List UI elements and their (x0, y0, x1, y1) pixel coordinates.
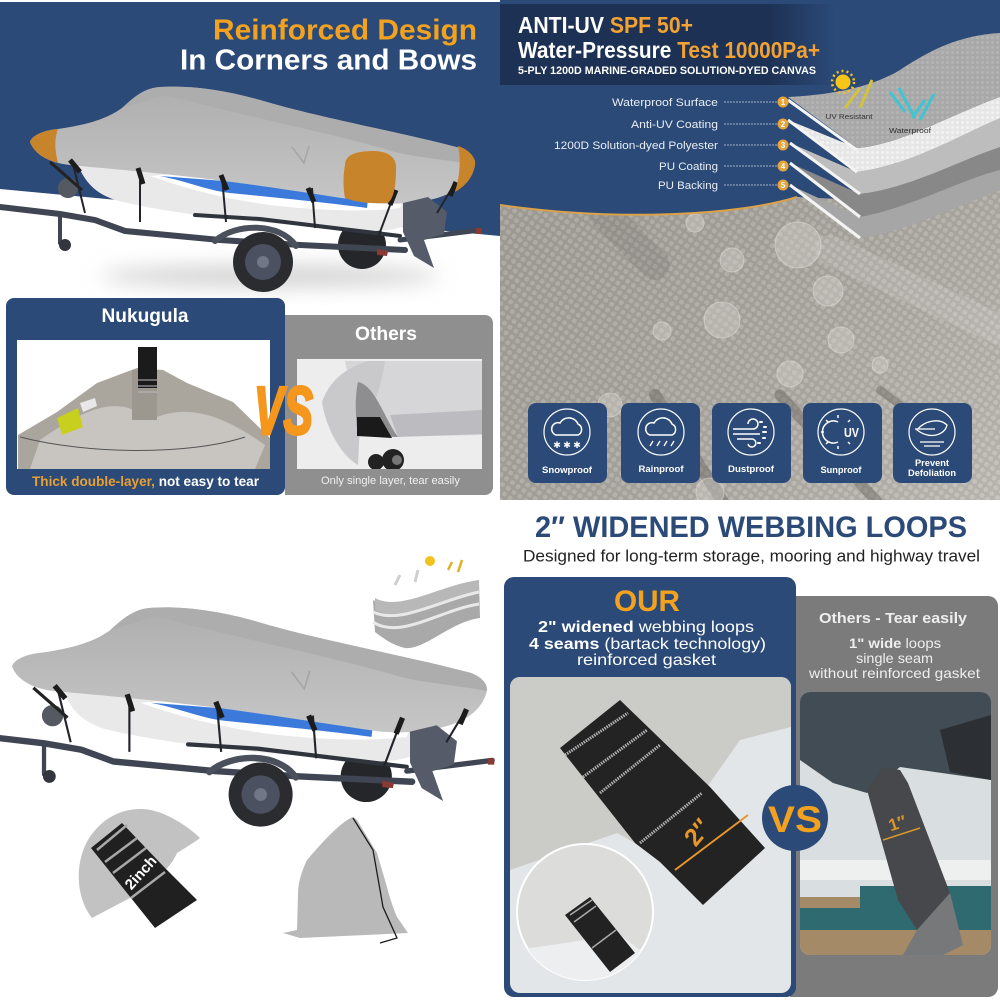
feature card: sunproof: Sunproof (820, 465, 862, 476)
feature card: prevent defoliation: Prevent (915, 458, 950, 469)
woven fabric background (500, 97, 1000, 500)
heading: reinforced design: In Corners and Bows (180, 44, 477, 76)
card: others: without reinforced gasket (808, 665, 980, 681)
strap tags (70, 160, 456, 205)
card: others: single seam (856, 650, 933, 666)
blue hull stripe (160, 176, 368, 208)
panel: anti-UV canvas layers (500, 0, 1000, 506)
photo: thin loop (800, 692, 991, 955)
callout 3: 3 (781, 141, 786, 150)
photo: wide loop (510, 677, 791, 993)
card title: Nukugula (102, 306, 189, 327)
card: our: reinforced gasket (577, 652, 717, 669)
photo: thin loop: 1″ (886, 812, 909, 835)
reinforced bow patch (30, 129, 58, 163)
card title: Others (355, 324, 417, 345)
callout 3: 1200D Solution-dyed Polyester (554, 140, 718, 152)
gold edge curve (500, 197, 797, 215)
outboard motor (403, 197, 447, 268)
dark header band (500, 4, 835, 85)
heading: anti-UV: Water-Pressure Test 10000Pa+ (518, 37, 820, 63)
feature card: prevent defoliation (893, 403, 972, 483)
callout 4: PU Coating (659, 161, 718, 173)
card: our: 2" widened webbing loops (538, 619, 754, 636)
callout 2 (631, 118, 788, 131)
badge: orange VS: VS (254, 373, 313, 449)
photo: single layer corner (297, 359, 482, 471)
tail lights (377, 228, 482, 256)
ground shadow (100, 265, 440, 287)
fabric folds (605, 215, 1000, 505)
feature card: dustproof (712, 403, 791, 483)
feature card: rainproof (621, 403, 700, 483)
boat on trailer (0, 87, 482, 292)
card: our: 4 seams (bartack technology) (529, 636, 766, 653)
card: others (790, 596, 998, 997)
callout 2: 2 (781, 120, 786, 129)
trailer wheel (233, 232, 293, 292)
heading: anti-UV: 5-PLY 1200D MARINE-GRADED SOLUTION-DYED CANVAS (518, 65, 816, 77)
card: our: OUR (614, 585, 680, 618)
callout 3 (554, 140, 788, 152)
callout 2: Anti-UV Coating (631, 119, 718, 131)
panel: product package (0, 556, 494, 943)
heading: reinforced design (180, 14, 477, 76)
bundled cover with strap (79, 809, 200, 928)
icon: UV resistant (826, 71, 873, 121)
reinforced corner patch (344, 151, 396, 203)
callout 1: Waterproof Surface (612, 97, 718, 109)
jockey wheel (59, 239, 71, 251)
panel: webbing loops (504, 511, 998, 997)
layered fabric icon (373, 556, 480, 648)
layer stack (788, 33, 1000, 238)
tie-down straps (72, 160, 455, 240)
inset detail (517, 844, 660, 985)
cover body (30, 87, 475, 204)
hull (78, 165, 412, 231)
callout 5 (658, 180, 788, 192)
fabric lighting (500, 206, 1000, 500)
bow strap (50, 162, 82, 190)
feature card: dustproof: Dustproof (728, 464, 775, 475)
feature card: prevent defoliation: Defoliation (908, 468, 956, 479)
badge: navy VS (762, 785, 828, 851)
feature card: snowproof: Snowproof (542, 465, 593, 476)
trailer frame (0, 207, 480, 250)
heading: reinforced design: Reinforced Design (213, 14, 477, 46)
feature card: sunproof: UV (844, 425, 859, 440)
panel: others comparison (285, 315, 493, 495)
callout 1 (612, 96, 788, 109)
subheading: Designed for long-term storage, mooring and highway travel (523, 546, 980, 566)
panel: reinforced design (0, 2, 500, 292)
panel: nukugula comparison (6, 298, 285, 495)
heading: widened webbing loops: 2″ WIDENED WEBBING LOOPS (535, 511, 967, 544)
rear wheel (338, 221, 386, 269)
bundled cover with strap: 2inch (122, 853, 161, 893)
card background (6, 298, 285, 495)
winch (58, 178, 78, 198)
callout 1: 1 (781, 98, 786, 107)
cover vent (292, 146, 309, 163)
badge: navy VS: VS (768, 799, 822, 840)
card background (285, 315, 493, 495)
navy header area (500, 0, 1000, 215)
reinforced stern patch (455, 146, 475, 192)
icon: waterproof: Waterproof (889, 126, 932, 135)
photo: double-layer corner (17, 340, 270, 469)
navy backdrop (0, 2, 500, 236)
callout 5: PU Backing (658, 180, 718, 192)
card caption: Thick double-layer, not easy to tear (32, 474, 260, 489)
card: our (504, 577, 796, 997)
heading: anti-UV: ANTI-UV SPF 50+ (518, 12, 693, 38)
card caption: Only single layer, tear easily (321, 475, 461, 487)
heading: anti-UV (518, 17, 820, 74)
water droplets (598, 214, 888, 506)
icon: UV resistant: UV Resistant (826, 112, 873, 121)
callout 5: 5 (781, 181, 786, 190)
card: others: Others - Tear easily (819, 610, 968, 627)
callout 4 (659, 160, 788, 173)
icon: waterproof (889, 88, 934, 135)
layer callouts (554, 96, 788, 192)
feature card: sunproof (803, 403, 882, 483)
card: others: 1" wide loops (849, 635, 941, 651)
feature card: snowproof: ✱ ✱ ✱ (553, 440, 581, 450)
callout 4: 4 (781, 162, 786, 171)
storage bag (283, 817, 408, 943)
cover roof shade (122, 87, 475, 165)
photo: wide loop: 2″ (679, 814, 717, 852)
boat with plain cover (0, 607, 494, 827)
hull highlight (150, 172, 405, 210)
feature card: rainproof: Rainproof (638, 464, 684, 475)
feature card: snowproof (528, 403, 607, 483)
